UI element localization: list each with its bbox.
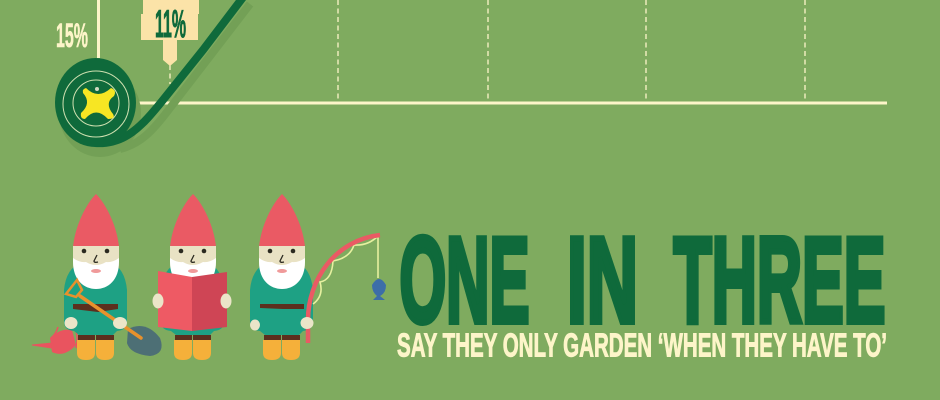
callout: 11% signpost bbox=[141, 0, 199, 66]
heading: one in three: IN bbox=[567, 212, 638, 348]
heading: one in three: ONE bbox=[400, 212, 530, 348]
gnome fishing bbox=[250, 194, 386, 360]
heading: one in three bbox=[400, 212, 886, 348]
watering can bbox=[32, 323, 77, 354]
fishing line and fish bbox=[313, 236, 386, 304]
hose shadow under reel bbox=[59, 69, 141, 157]
shovel bbox=[66, 280, 162, 356]
belt bbox=[73, 304, 118, 312]
hose reel bbox=[55, 58, 136, 147]
hose shadow bbox=[120, 4, 250, 149]
hose bbox=[95, 0, 244, 143]
belt bbox=[260, 304, 304, 309]
hands bbox=[64, 317, 78, 329]
chart: hose line chart: 15% bbox=[56, 17, 88, 55]
hands bbox=[250, 320, 260, 330]
chart axis bbox=[97, 0, 887, 104]
gnome with shovel and watering can bbox=[32, 194, 162, 360]
hands bbox=[152, 294, 164, 308]
gnome reading a book bbox=[152, 194, 232, 360]
callout: 11% signpost: 11% bbox=[155, 3, 186, 46]
book bbox=[158, 271, 227, 331]
fishing rod bbox=[308, 235, 380, 343]
chart: hose line chart bbox=[55, 0, 887, 157]
yellow flower bbox=[81, 88, 115, 119]
